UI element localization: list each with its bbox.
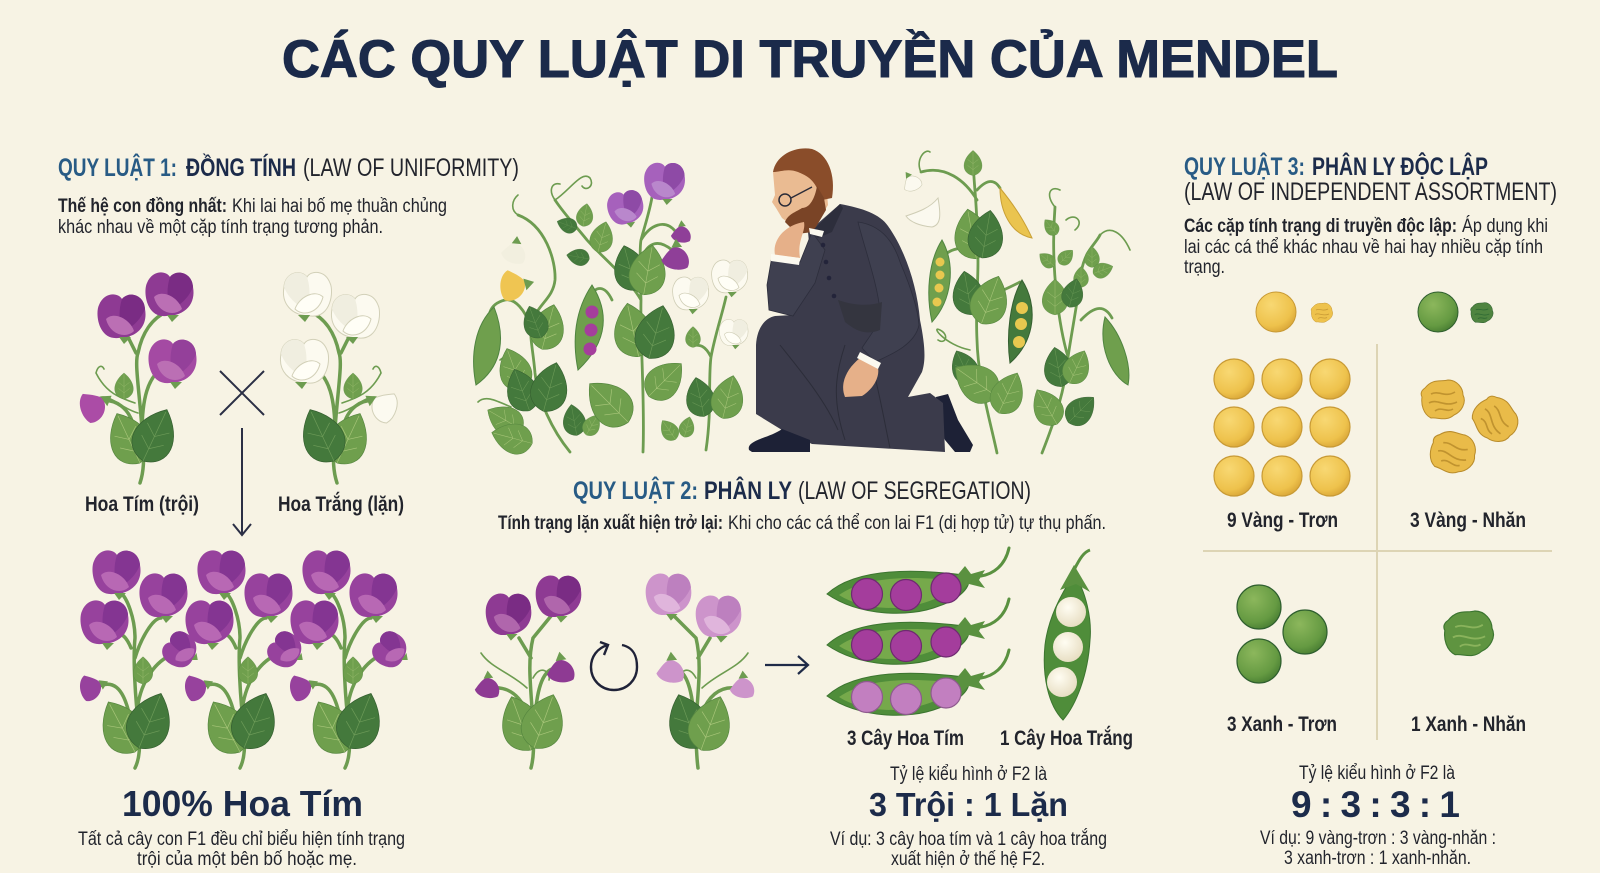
illustration: Mendel kneeling (749, 148, 973, 452)
collar (811, 204, 843, 238)
buttons (821, 243, 836, 298)
text block: law 3 description: Áp dụng khi (1462, 216, 1548, 237)
text block: law 2 description: Tính trạng lặn xuất hiện trở lại: (498, 513, 723, 534)
icon: purple seed pod 1 (827, 548, 1009, 613)
text block: law 1 description: Khi lai hai bố mẹ thuần chủng (232, 196, 447, 217)
label: purple dominant: Hoa Tím (trội) (85, 493, 199, 516)
text block: law 3 description: trạng. (1184, 257, 1225, 278)
panel: law 3 independent assortment (1184, 151, 1557, 869)
back shoe (936, 394, 973, 452)
text block: law 1 description (58, 196, 447, 238)
hand at chin (775, 222, 804, 258)
icon: 3 yellow wrinkled peas (1421, 380, 1524, 479)
text block: law 3 example: Ví dụ: 9 vàng-trơn : 3 vàng-nhăn : (1260, 828, 1496, 849)
text block: law 3 description: lai các cá thể khác nhau về hai hay nhiều cặp tính (1184, 237, 1543, 258)
caption: F2 ratio label: Tỷ lệ kiểu hình ở F2 là (1299, 763, 1455, 784)
label: white recessive: Hoa Trắng (lặn) (278, 492, 404, 516)
icon: green wrinkled pea (1444, 611, 1493, 656)
text block: law 2 example: Ví dụ: 3 cây hoa tím và 1 cây hoa trắng (830, 828, 1107, 850)
label: 3 purple: 3 Cây Hoa Tím (847, 727, 964, 750)
label: 1 white: 1 Cây Hoa Trắng (1000, 726, 1133, 750)
heading: law 3: PHÂN LY ĐỘC LẬP (1312, 151, 1488, 181)
heading: law 1: ĐỒNG TÍNH (186, 152, 296, 182)
arrow: parents to F1 (233, 428, 251, 535)
text block: law 1 description: khác nhau về một cặp tính trạng tương phản. (58, 217, 383, 238)
label: 1 green wrinkled: 1 Xanh - Nhăn (1411, 713, 1526, 736)
illustration: right pea vines (897, 150, 1130, 453)
icon: parent yellow peas (1256, 292, 1333, 332)
icon: white seed pod (1044, 550, 1090, 720)
text block: law 3 example: 3 xanh-trơn : 1 xanh-nhăn. (1284, 848, 1471, 869)
text block: law 3 example (1260, 828, 1496, 869)
text block: F1 explanation (78, 829, 405, 870)
pod: yellow peas 2 (1008, 280, 1032, 363)
title: CÁC QUY LUẬT DI TRUYỀN CỦA MENDEL (282, 28, 1338, 89)
heading: law 2: (LAW OF SEGREGATION) (798, 477, 1031, 505)
text block: F1 explanation: trội của một bên bố hoặc mẹ. (137, 849, 357, 870)
pod: green (474, 307, 501, 385)
heading: law 3: QUY LUẬT 3: (1184, 151, 1305, 181)
head and face (772, 158, 828, 232)
text block: law 3 description (1184, 216, 1548, 278)
result: 9:3:3:1: 9 : 3 : 3 : 1 (1291, 784, 1460, 825)
heading: law 1: QUY LUẬT 1: (58, 152, 177, 182)
heading: law 1: (LAW OF UNIFORMITY) (303, 154, 519, 182)
heading: law 3 (1184, 151, 1557, 206)
icon: purple seed pod 2 (827, 599, 1009, 664)
icon: purple flower plant (74, 272, 197, 483)
icon group: three F1 purple plants (76, 550, 417, 768)
front shoe (749, 429, 810, 452)
robe (756, 204, 945, 452)
panel: law 2 segregation (475, 475, 1133, 870)
illustration: left pea vines (474, 163, 749, 458)
heading: law 2 (573, 475, 1031, 505)
text block: law 1 description: Thế hệ con đồng nhất: (58, 196, 227, 217)
text block: F1 explanation: Tất cả cây con F1 đều chỉ biểu hiện tính trạng (78, 829, 405, 850)
dividers (1203, 344, 1552, 740)
result: 100% purple: 100% Hoa Tím (122, 783, 363, 824)
robe folds and sash (838, 300, 882, 332)
text block: law 2 example (830, 828, 1107, 870)
label: 3 green smooth: 3 Xanh - Trơn (1227, 713, 1337, 736)
text block: law 2 description: Khi cho các cá thể con lai F1 (dị hợp tử) tự thụ phấn. (728, 513, 1106, 534)
pod: purple peas (575, 285, 603, 370)
label: 3 yellow wrinkled: 3 Vàng - Nhăn (1410, 509, 1526, 532)
text block: law 2 example: xuất hiện ở thế hệ F2. (891, 849, 1045, 870)
icon: pale F1 plant (646, 573, 754, 768)
pod: green right (1103, 317, 1129, 385)
icon: cross symbol (220, 371, 264, 415)
icon: parent green peas (1418, 292, 1493, 332)
hand on knee (843, 358, 878, 397)
label: 9 yellow smooth: 9 Vàng - Trơn (1227, 509, 1338, 532)
arrow: to offspring pods (765, 656, 808, 674)
arm supporting chin (767, 232, 825, 316)
icon: 9 yellow round peas (1214, 359, 1350, 496)
heading: law 2: QUY LUẬT 2: (573, 475, 698, 505)
icon: dark F1 plant (475, 575, 581, 768)
heading: law 2: PHÂN LY (704, 475, 792, 505)
heading: law 1 (58, 152, 519, 182)
caption: F2 ratio label: Tỷ lệ kiểu hình ở F2 là (890, 764, 1047, 785)
pod: yellow peas 1 (929, 240, 950, 322)
icon: self-pollination cycle arrow (591, 642, 637, 690)
icon: pale purple seed pod 3 (827, 650, 1009, 715)
pod: yellow hanging (1000, 188, 1032, 238)
icon: 3 green round peas (1237, 585, 1327, 683)
text block: law 3 description: Các cặp tính trạng di truyền độc lập: (1184, 216, 1457, 237)
result: 3 dominant to 1 recessive: 3 Trội : 1 Lặn (869, 786, 1068, 823)
panel: law 1 uniformity (58, 152, 519, 870)
icon: white flower plant (280, 272, 403, 483)
text block: law 2 description (498, 513, 1106, 534)
right arm (858, 222, 919, 362)
